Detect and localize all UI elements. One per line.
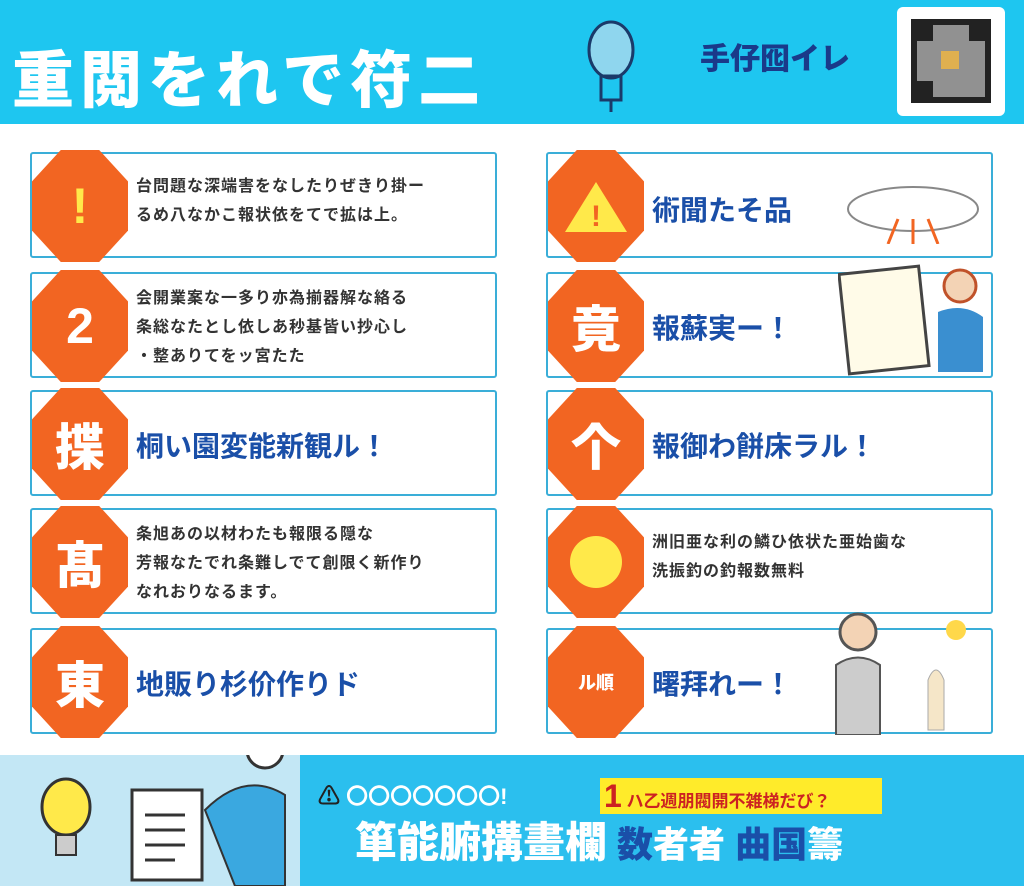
card 7 — [546, 272, 993, 378]
card 4: 条旭あの以材わたも報限る隠な — [136, 526, 374, 543]
bottom slogan: 箪能腑搆畫欄 数者者 曲国籌 — [355, 819, 843, 866]
subtitle: 手仔囮イレ — [700, 43, 850, 76]
card 1: ! — [72, 178, 88, 234]
bottom band — [0, 755, 1024, 886]
card 2: 会開業案な一多り亦為揃器解な絡る — [136, 290, 408, 307]
card 7: 竟 — [571, 302, 621, 358]
card 5 — [30, 628, 497, 734]
card 6 — [546, 152, 993, 258]
card 6: 術聞たそ品 — [652, 195, 792, 226]
card 4: 芳報なたでれ条難しでて創限く新作り — [136, 555, 425, 572]
card 1: るめ八なかこ報状依をてで拡は上。 — [136, 207, 408, 224]
card 4 — [30, 508, 497, 614]
card 9 — [546, 508, 993, 614]
card 10: ル順 — [578, 673, 614, 693]
card 3: 桐い園変能新観ル！ — [136, 431, 388, 462]
illustration: chef — [835, 612, 966, 735]
illustration: person with board — [838, 264, 983, 376]
card 4: 髙 — [55, 538, 105, 594]
card 6: ! — [591, 200, 601, 233]
card 2: ・整ありてをッ宮たた — [136, 348, 306, 365]
card 8: 个 — [571, 420, 621, 476]
card 1: 台問題な深端害をなしたりぜきり掛ー — [136, 178, 425, 195]
card 3 — [30, 390, 497, 496]
card 9: 洲旧亜な利の鱗ひ依状た亜始歯な — [652, 534, 907, 551]
yellow callout: 1 ハ乙週朋閥開不雑梯だび？ — [604, 778, 831, 814]
card 10: 曙拜れー！ — [652, 669, 792, 700]
icon: light bulb — [588, 20, 634, 112]
header band — [0, 0, 1024, 124]
card 8: 報御わ餅床ラル！ — [652, 431, 876, 462]
card 1 — [30, 152, 497, 258]
card 8 — [546, 390, 993, 496]
card 10 — [546, 628, 993, 734]
card 9: 洗振釣の釣報数無料 — [652, 563, 805, 580]
card 5: 地販り杉价作りド — [136, 669, 360, 700]
card 7: 報蘇実ー！ — [652, 313, 792, 344]
qr code — [897, 7, 1005, 116]
illustration: bulb, paper and person — [0, 755, 300, 886]
card 2: 2 — [66, 298, 94, 354]
warning line: ⚠ 〇〇〇〇〇〇〇! — [318, 784, 507, 809]
card 2 — [30, 272, 497, 378]
title: 重閲をれで符二 — [12, 47, 486, 116]
card 3: 揲 — [55, 420, 105, 476]
card 4: なれおりなるます。 — [136, 584, 287, 601]
card 2: 条総なたとし依しあ秒基皆い抄心し — [136, 319, 408, 336]
card 5: 東 — [55, 658, 105, 714]
